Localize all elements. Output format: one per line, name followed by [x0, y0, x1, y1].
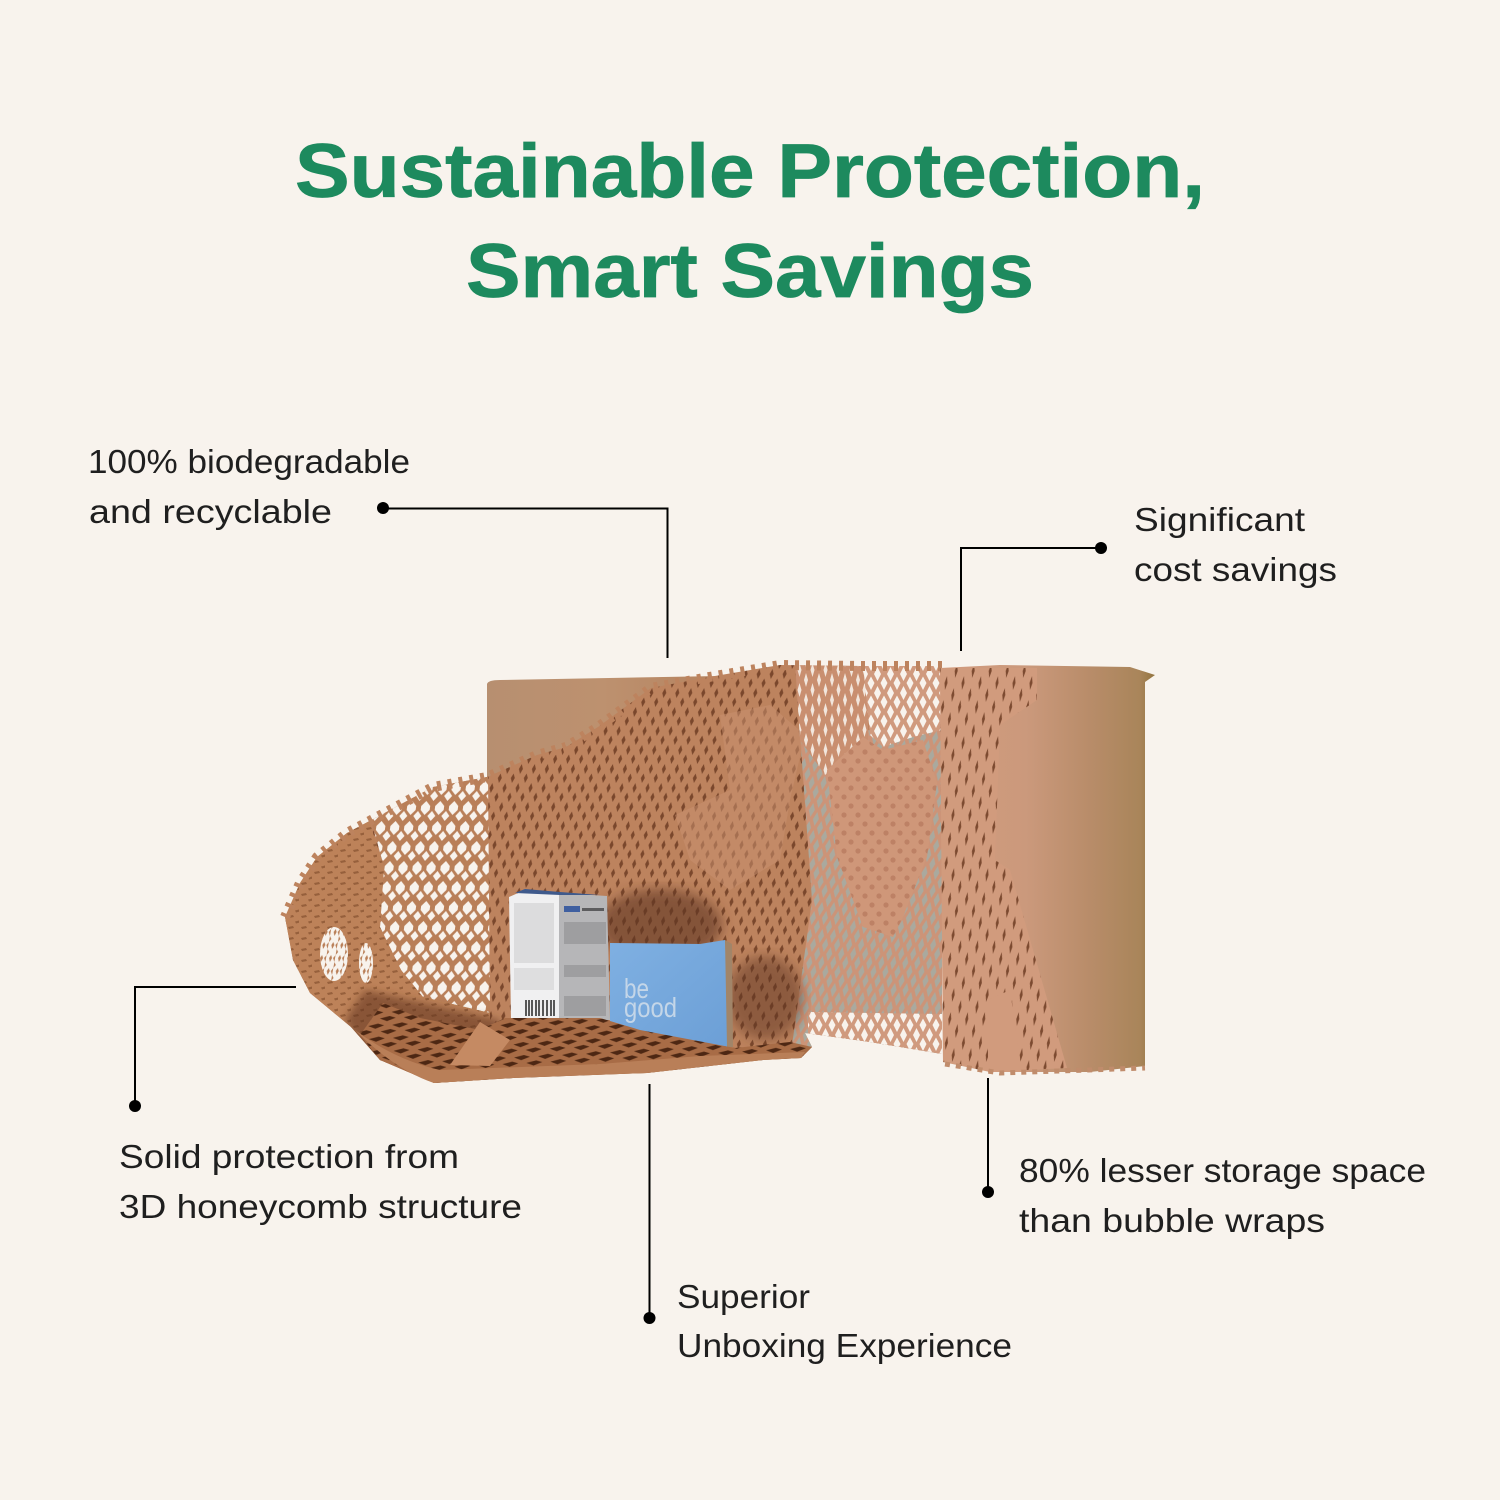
- callout: honeycomb protection: 3D honeycomb structure: [119, 1188, 522, 1225]
- title: [295, 129, 1205, 314]
- callout: storage space: than bubble wraps: [1019, 1202, 1325, 1239]
- unrolled honeycomb sheet: [280, 660, 950, 1090]
- blue product box: good: [624, 992, 677, 1023]
- callout: cost savings: Significant: [1134, 501, 1305, 538]
- see-through blotch two: [359, 943, 373, 983]
- blue product box: [610, 940, 733, 1047]
- solid patch on right mesh: [827, 737, 937, 937]
- light patches on mid mesh: [675, 705, 805, 890]
- callout: cost savings: cost savings: [1134, 551, 1337, 588]
- callout: biodegradable: and recyclable: [89, 493, 332, 530]
- roll solid patch: [988, 990, 1022, 1072]
- callout: honeycomb protection: Solid protection from: [119, 1138, 459, 1175]
- callout: storage space: [982, 1078, 1426, 1239]
- callout: biodegradable: [88, 443, 668, 658]
- honeycomb paper roll illustration: [280, 660, 1155, 1090]
- title: Smart Savings: [466, 229, 1034, 314]
- callout: unboxing experience: [644, 1084, 1012, 1364]
- front paper roll: [940, 665, 1155, 1073]
- back paper roll: [487, 676, 720, 800]
- see-through blotch one: [320, 927, 348, 981]
- callout: unboxing experience: Superior: [677, 1278, 810, 1315]
- right grey mesh: [790, 725, 945, 1060]
- jagged upper edge: [285, 665, 942, 917]
- title: Sustainable Protection,: [295, 129, 1205, 214]
- roll honeycomb slits: [940, 668, 1067, 1072]
- dark lower wall: [342, 987, 502, 1061]
- callout: storage space: 80% lesser storage space: [1019, 1152, 1426, 1189]
- blue product box: be: [624, 973, 649, 1004]
- shadow right of blue box: [727, 956, 803, 1040]
- barcode: [526, 1000, 554, 1016]
- white product box: [509, 889, 610, 1020]
- callout: honeycomb protection: [119, 987, 522, 1225]
- callout: cost savings: [961, 501, 1337, 651]
- left see-through mesh: [372, 776, 490, 1013]
- bottom white mesh: [808, 1012, 942, 1054]
- top slit mesh: [795, 662, 868, 775]
- floor of crumpled honeycomb: [355, 1003, 812, 1083]
- solid left curl: [280, 820, 490, 1090]
- callout: unboxing experience: Unboxing Experience: [677, 1327, 1012, 1364]
- roll bottom teeth: [945, 1064, 1145, 1073]
- shadow above blue box: [598, 889, 722, 961]
- top white mesh: [863, 664, 942, 747]
- callout: biodegradable: 100% biodegradable: [88, 443, 410, 480]
